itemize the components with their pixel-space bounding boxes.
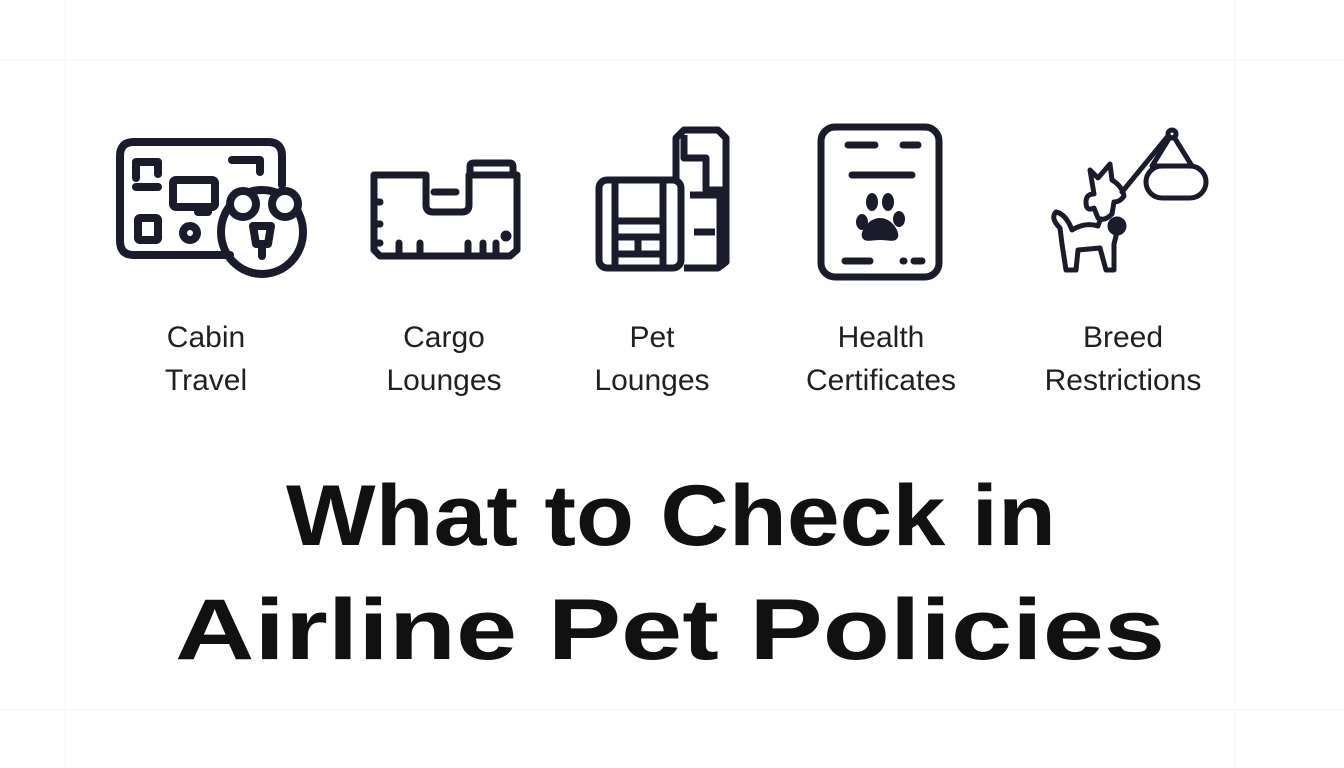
label: cargo lounges: Cargo [403, 321, 485, 354]
label: pet lounges: Lounges [594, 364, 710, 397]
labels [165, 321, 1201, 397]
label: breed restrictions: Breed [1083, 321, 1163, 354]
icon: cabin travel [120, 142, 303, 274]
icon: pet lounges [599, 130, 726, 268]
label: breed restrictions: Restrictions [1045, 364, 1201, 397]
label: cabin travel: Cabin [167, 321, 245, 354]
icon: breed restrictions [1054, 130, 1206, 270]
icon: cargo [374, 163, 517, 256]
title: Airline Pet Policies [175, 582, 1165, 678]
title: What to Check in [286, 468, 1056, 564]
title [175, 468, 1165, 678]
label: cargo lounges: Lounges [386, 364, 502, 397]
icon: health certificate [821, 127, 939, 277]
label: health certificates: Health [838, 321, 924, 354]
label: pet lounges: Pet [629, 321, 675, 354]
label: cabin travel: Travel [165, 364, 247, 397]
label: health certificates: Certificates [806, 364, 956, 397]
